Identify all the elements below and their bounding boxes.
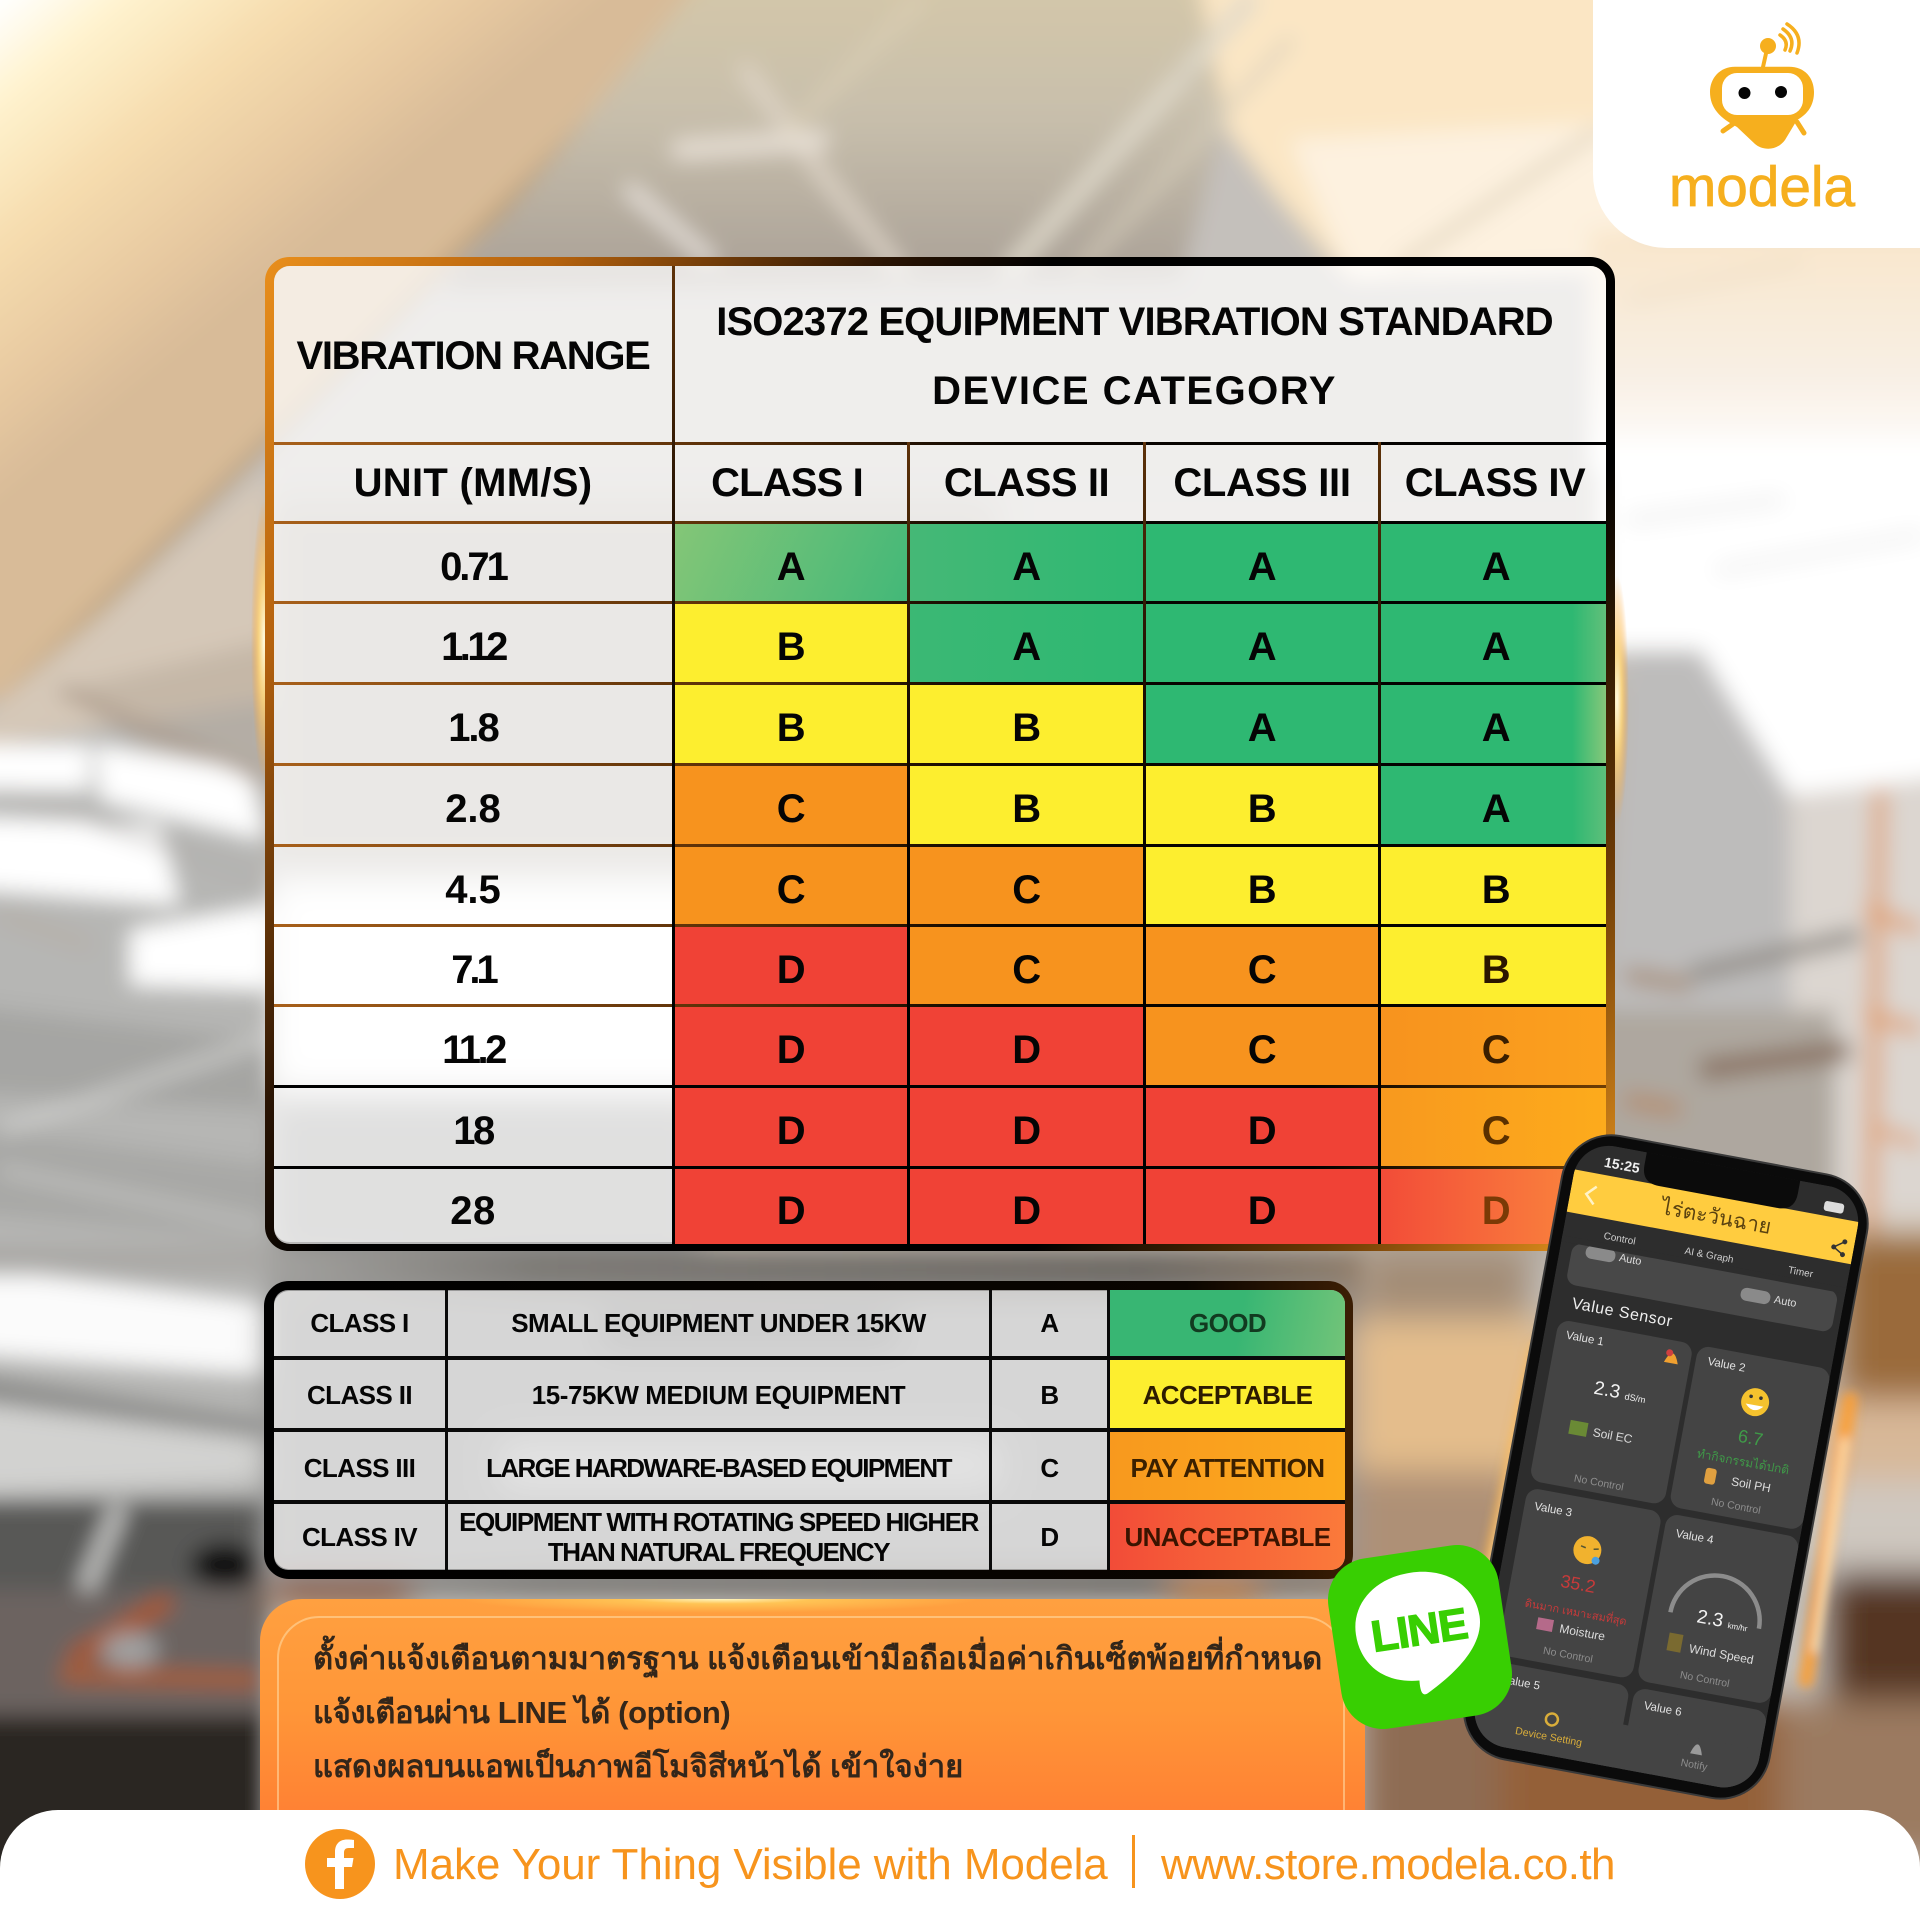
phone screen (1467, 1139, 1864, 1800)
app header bar: ไร่ตะวันฉาย (1657, 1195, 1773, 1239)
sensor cards 5 and 6 with bottom nav: Value 6 (1643, 1700, 1683, 1719)
row 1.12: A (1482, 625, 1510, 669)
sensor card: moisture: ดินมาก เหมาะสมที่สุด (1524, 1595, 1628, 1628)
legend row: class III: C (1040, 1453, 1059, 1483)
row 18: D (777, 1109, 805, 1153)
auto toggle strip (1567, 1244, 1837, 1332)
logo panel (1593, 0, 1920, 248)
sensor card: soil pH: ทำกิจกรรมได้ปกติ (1696, 1447, 1790, 1477)
row 7.1: 7.1 (451, 948, 495, 992)
sensor card: wind speed with gauge: No Control (1679, 1669, 1730, 1690)
sensor card: moisture: 35.2 (1559, 1571, 1597, 1597)
modela logo: modela (1669, 155, 1855, 219)
legend row: class II: 15-75KW MEDIUM EQUIPMENT (532, 1380, 905, 1410)
row 11.2 (442, 1007, 1606, 1085)
app header bar (1567, 1169, 1859, 1264)
website url: www.store.modela.co.th (1161, 1840, 1615, 1889)
row 18: C (1482, 1109, 1510, 1153)
sensor card: moisture: Moisture (1558, 1621, 1606, 1644)
sensor card: wind speed with gauge: 2.3 km/hr (1695, 1606, 1750, 1636)
row 11.2: C (1248, 1028, 1276, 1072)
row 28: D (777, 1188, 805, 1232)
row 11.2: D (777, 1028, 805, 1072)
legend row: class II (307, 1360, 1345, 1428)
legend row: class III: CLASS III (304, 1453, 415, 1483)
sensor card: soil pH (1669, 1345, 1831, 1531)
legend row: class II: CLASS II (307, 1380, 412, 1410)
value sensor heading: Value Sensor (1570, 1295, 1674, 1331)
legend row: class I: CLASS I (310, 1308, 409, 1338)
row 28: D (1482, 1188, 1510, 1232)
legend row: class II: B (1040, 1380, 1059, 1410)
row 4.5: B (1248, 868, 1276, 912)
sensor card: moisture: Value 3 (1533, 1501, 1573, 1520)
row 2.8: C (777, 787, 805, 831)
app tabs: Timer (1787, 1265, 1815, 1281)
row 2.8: 2.8 (445, 787, 501, 831)
row 1.12: A (1248, 625, 1276, 669)
sensor card: moisture (1497, 1487, 1663, 1679)
class header row: UNIT (MM/S) (354, 461, 592, 505)
class header row: CLASS II (944, 461, 1109, 505)
sensor cards 5 and 6 with bottom nav: Value 5 (1501, 1674, 1541, 1693)
divider (1132, 1835, 1135, 1888)
sensor card: soil EC: No Control (1573, 1473, 1625, 1494)
class header row: CLASS I (711, 461, 863, 505)
row 1.12 (441, 604, 1606, 682)
sensor card: soil EC: Value 1 (1565, 1330, 1605, 1348)
sensor card: soil EC: 2.3 dS/m (1592, 1378, 1648, 1408)
legend row: class III (304, 1432, 1345, 1500)
row 28: D (1248, 1188, 1276, 1232)
legend row: class IV: CLASS IV (302, 1522, 417, 1552)
white footer bar (0, 1810, 1920, 1920)
row 2.8: A (1482, 787, 1510, 831)
notch and status bar: 15:25 (1603, 1154, 1641, 1176)
row 4.5: C (1012, 868, 1041, 912)
row 28 (450, 1169, 1563, 1244)
row 1.12: B (777, 625, 805, 669)
row 7.1: C (1012, 948, 1041, 992)
legend row: class IV: THAN NATURAL FREQUENCY (548, 1537, 889, 1567)
row 2.8: B (1248, 787, 1276, 831)
row 4.5: B (1482, 868, 1510, 912)
class header row: CLASS III (1173, 461, 1351, 505)
row 7.1: D (777, 948, 805, 992)
orange feature panel (260, 1599, 1365, 1819)
legend row: class I: A (1040, 1308, 1059, 1338)
row 2.8: B (1012, 787, 1041, 831)
sensor cards 5 and 6 with bottom nav: Notify (1680, 1757, 1709, 1774)
auto toggle strip: Auto (1773, 1294, 1797, 1310)
LINE app icon: LINE (1368, 1599, 1470, 1662)
row 4.5 (445, 847, 1606, 924)
app tabs: AI & Graph (1684, 1246, 1734, 1266)
legend row: class I: SMALL EQUIPMENT UNDER 15KW (511, 1308, 926, 1338)
slogan: Make Your Thing Visible with Modela (393, 1840, 1108, 1889)
row 0.71: A (1248, 544, 1276, 588)
legend row: class IV: D (1040, 1522, 1059, 1552)
row 1.8 (448, 685, 1606, 763)
app tabs: Control (1603, 1231, 1636, 1248)
heading: vibration range: VIBRATION RANGE (296, 334, 650, 378)
row 1.12: 1.12 (441, 625, 505, 669)
notch and status bar (1604, 1152, 1844, 1214)
sensor card: soil EC: Soil EC (1592, 1425, 1634, 1446)
Thai feature text (313, 1636, 1322, 1784)
legend row: class IV: EQUIPMENT WITH ROTATING SPEED HIGHER (459, 1507, 978, 1537)
sensor card: wind speed with gauge: Wind Speed (1688, 1641, 1755, 1667)
heading: ISO2372 standard: DEVICE CATEGORY (932, 369, 1337, 413)
row 7.1 (451, 927, 1606, 1004)
row 0.71: A (777, 544, 805, 588)
legend row: class I: GOOD (1189, 1308, 1266, 1338)
row 11.2: D (1012, 1028, 1041, 1072)
sensor card: wind speed with gauge (1636, 1513, 1800, 1705)
main vibration standard table (265, 257, 1615, 1251)
row 18: D (1248, 1109, 1276, 1153)
legend table: classes and grades (264, 1281, 1353, 1579)
sensor card: wind speed with gauge: Value 4 (1675, 1528, 1715, 1547)
row 28: 28 (450, 1188, 496, 1232)
sensor card: soil pH: No Control (1710, 1496, 1762, 1517)
row 1.12: A (1012, 625, 1041, 669)
row 1.8: B (1012, 706, 1041, 750)
table header row (296, 300, 1553, 413)
sensor card: soil EC (1529, 1319, 1694, 1505)
icon: facebook (305, 1829, 375, 1899)
row 2.8 (445, 766, 1606, 844)
row 7.1: B (1482, 948, 1510, 992)
row 18: 18 (453, 1109, 493, 1153)
row 0.71: 0.71 (440, 544, 506, 588)
row 0.71 (440, 524, 1606, 601)
class header row (354, 461, 1586, 505)
feature line 3: แสดงผลบนแอพเป็นภาพอีโมจิสีหน้าได้ เข้าใจง่าย (313, 1749, 963, 1784)
app tabs (1604, 1232, 1814, 1278)
row 28: D (1012, 1188, 1041, 1232)
row 0.71: A (1482, 544, 1510, 588)
row 11.2: C (1482, 1028, 1510, 1072)
row 4.5: C (777, 868, 805, 912)
legend row: class III: LARGE HARDWARE-BASED EQUIPMENT (486, 1453, 951, 1483)
row 18 (453, 1088, 1606, 1166)
legend row: class III: PAY ATTENTION (1131, 1453, 1324, 1483)
legend row: class IV (302, 1504, 1345, 1570)
phone with sensor app (1328, 1134, 1869, 1800)
phone body (1456, 1127, 1876, 1807)
auto toggle strip: Auto (1618, 1252, 1642, 1268)
sensor cards 5 and 6 with bottom nav: Device Setting (1514, 1725, 1583, 1749)
legend row: class I (310, 1290, 1345, 1356)
legend row: class II: ACCEPTABLE (1143, 1380, 1312, 1410)
legend row: class IV: UNACCEPTABLE (1124, 1522, 1331, 1552)
robot head (1710, 67, 1814, 149)
row 1.8: B (777, 706, 805, 750)
heading: ISO2372 standard (716, 300, 1553, 413)
row 1.8: 1.8 (448, 706, 498, 750)
row 4.5: 4.5 (445, 868, 501, 912)
heading: ISO2372 standard: ISO2372 EQUIPMENT VIBRATION STANDARD (716, 300, 1553, 344)
sensor card: moisture: No Control (1542, 1645, 1594, 1666)
modela logo (1669, 22, 1856, 219)
row 7.1: C (1248, 948, 1276, 992)
sensor card: soil pH: Soil PH (1730, 1474, 1772, 1495)
row 0.71: A (1012, 544, 1041, 588)
row 1.8: A (1482, 706, 1510, 750)
class header row: CLASS IV (1405, 461, 1585, 505)
feature line 2: แจ้งเตือนผ่าน LINE ได้ (option) (313, 1695, 730, 1730)
row 11.2: 11.2 (442, 1028, 504, 1072)
sensor cards 5 and 6 with bottom nav (1474, 1664, 1766, 1788)
row 18: D (1012, 1109, 1041, 1153)
sensor card: soil pH: 6.7 (1736, 1426, 1765, 1450)
LINE app icon (1322, 1539, 1518, 1735)
feature line 1: ตั้งค่าแจ้งเตือนตามมาตรฐาน แจ้งเตือนเข้ามือถือเมื่อค่าเกินเซ็ตพ้อยที่กำหนด (313, 1641, 1322, 1676)
row 1.8: A (1248, 706, 1276, 750)
sensor card: soil pH: Value 2 (1707, 1356, 1746, 1375)
